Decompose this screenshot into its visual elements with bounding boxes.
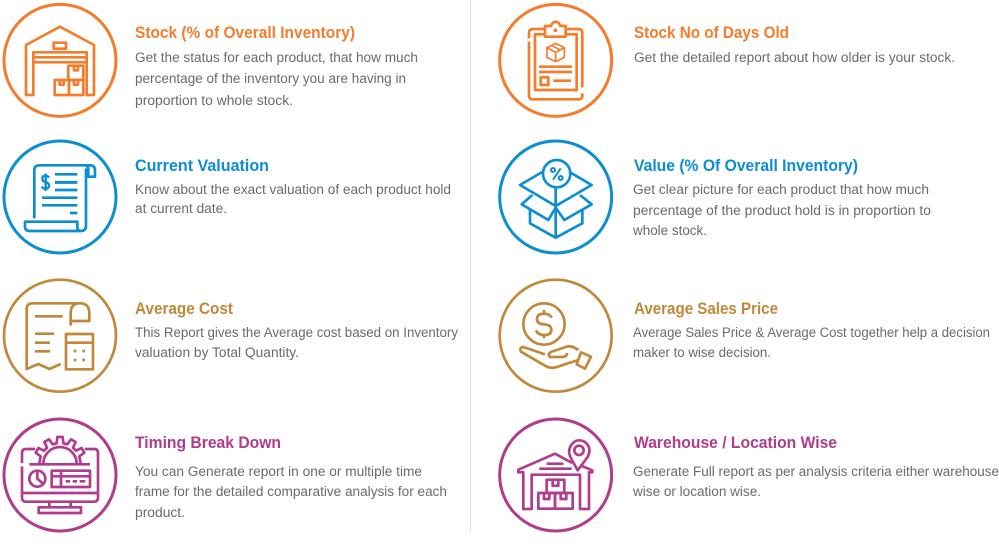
text: stock description: percentage of the inventory you are having in [135,71,406,86]
text: stock description: proportion to whole stock. [135,93,293,108]
icon: clipboard with box [500,4,612,116]
icon: warehouse with boxes [4,4,116,116]
heading: stock: Stock (% of Overall Inventory) [135,24,355,42]
text: average sales price description: maker to wise decision. [633,345,771,360]
text: current valuation description [135,182,451,216]
heading: timing break down: Timing Break Down [135,434,281,452]
icon: receipt and calculator [4,280,116,392]
text: timing break down description: frame for the detailed comparative analysis for each [135,484,447,499]
text: stock description [135,50,418,108]
text: average sales price description: Average Sales Price & Average Cost together help a decision [633,325,990,340]
heading: average sales price: Average Sales Price [634,300,778,318]
text: timing break down description: product. [135,505,185,520]
icon: open box with percent [500,141,612,253]
icon: scroll with dollar [4,141,116,253]
text: value description: percentage of the product hold is in proportion to [633,203,931,218]
heading: stock no of days old: Stock No of Days Old [634,24,789,42]
icon: warehouse with location pin [500,419,612,531]
text: current valuation description: Know about the exact valuation of each product hold [135,182,451,197]
text: average cost description: valuation by Total Quantity. [135,345,299,360]
text: stock description: Get the status for each product, that how much [135,50,418,65]
heading: current valuation: Current Valuation [135,157,269,175]
text: value description: Get clear picture for each product that how much [633,182,929,197]
text: value description [632,182,931,238]
heading: average cost: Average Cost [135,300,233,318]
heading: warehouse location wise: Warehouse / Location Wise [634,434,837,452]
text: warehouse location wise description: Generate Full report as per analysis criteria either warehouse [633,464,999,479]
text: current valuation description: at current date. [135,201,227,216]
text: warehouse location wise description [632,464,999,499]
text: average cost description: This Report gives the Average cost based on Inventory [135,325,458,340]
text: warehouse location wise description: wise or location wise. [632,484,761,499]
text: timing break down description: You can Generate report in one or multiple time [135,464,422,479]
icon: hand with coin [500,280,612,392]
text: timing break down description [135,464,447,520]
text: stock no of days old description: Get the detailed report about how older is your stock. [634,50,955,65]
heading: value: Value (% Of Overall Inventory) [634,157,858,175]
text: average sales price description [633,325,990,360]
text: average cost description [135,325,458,360]
icon: monitor with gear [4,419,116,531]
text: value description: whole stock. [632,223,707,238]
